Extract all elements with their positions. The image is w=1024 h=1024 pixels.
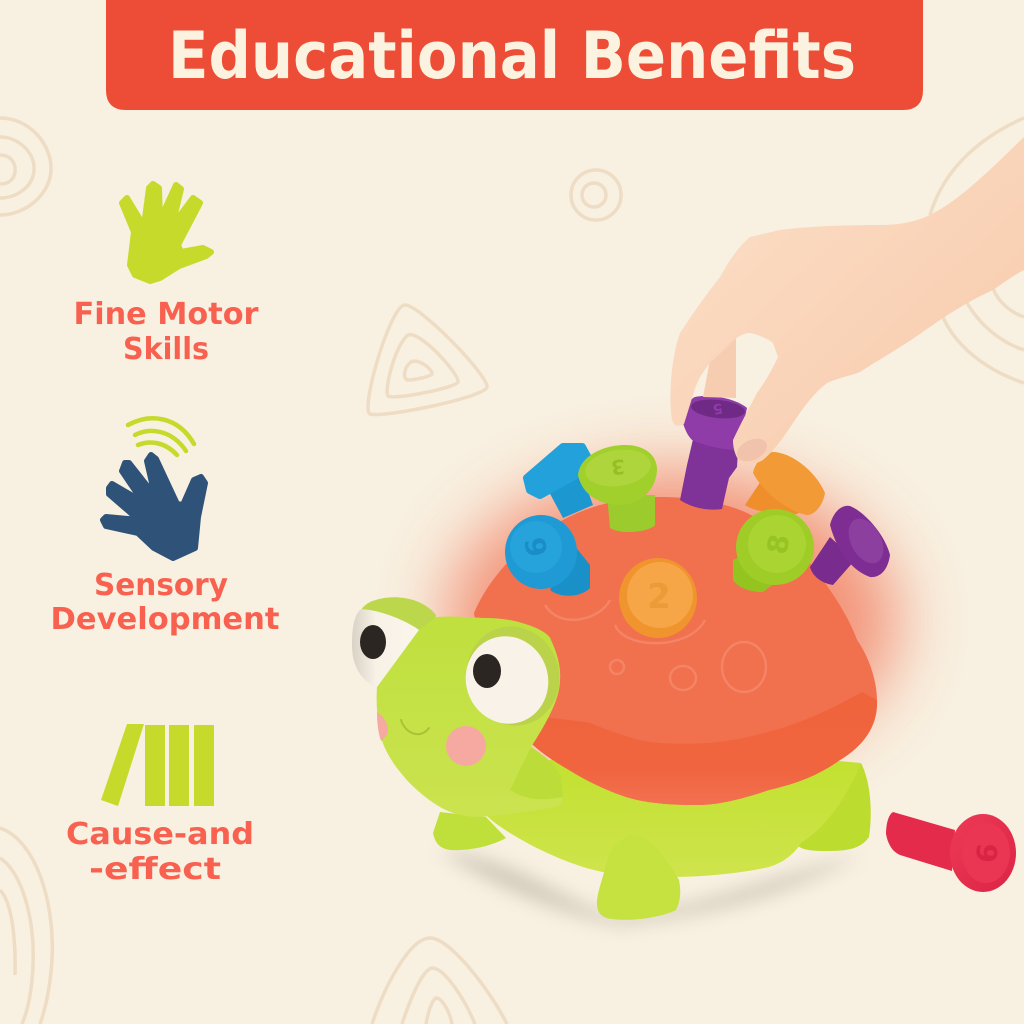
peg: purple: 5 [711,399,724,417]
hand holding peg [670,137,1024,466]
peg: blue back [527,447,593,518]
peg: green back: 3 [610,454,626,480]
shell rings [545,600,766,692]
benefit: fine motor skills: Fine Motor [74,297,259,332]
title banner [106,0,923,110]
benefit: cause and effect [66,724,254,887]
peg: green back [578,445,657,532]
peg: blue front: 6 [519,534,554,559]
peg: orange number 2 [619,558,697,638]
icon: sound waves [128,418,194,455]
front foot [597,835,680,920]
far eye socket [354,597,436,695]
icon: blue hand [103,455,205,558]
head [377,617,563,817]
icon: books [101,724,214,806]
ground shadow [440,850,860,925]
benefit: sensory development: Development [50,602,280,637]
left foot [433,812,506,850]
peg: green front [733,509,814,592]
shell brim [531,692,877,805]
peg: orange number 2: 2 [647,577,671,617]
benefit: sensory development: Sensory [94,568,228,603]
shell [474,497,877,805]
peg: purple [680,396,747,510]
peg: loose red [886,812,1016,892]
turtle toy [352,396,1016,925]
far eye [352,609,419,688]
benefit: sensory development [50,418,280,637]
benefit: cause and effect: Cause-and [66,817,254,852]
number pegs [505,396,1016,892]
cheeks and smile [446,726,486,766]
benefit: fine motor skills: Skills [123,332,209,367]
shell glow [447,470,897,770]
back foot [798,763,871,851]
eye rim [454,614,572,738]
peg: purple right [810,506,891,585]
title banner: Educational Benefits [168,19,856,94]
body [486,740,861,877]
icon: lime hand [122,184,211,281]
near eye [454,625,560,735]
benefit: cause and effect: -effect [89,852,221,887]
benefit: fine motor skills [74,184,259,367]
peg: blue front [505,515,590,596]
peg: green front: 8 [761,532,796,557]
peg: orange back [745,452,825,515]
peg: loose red: 6 [970,842,1005,864]
